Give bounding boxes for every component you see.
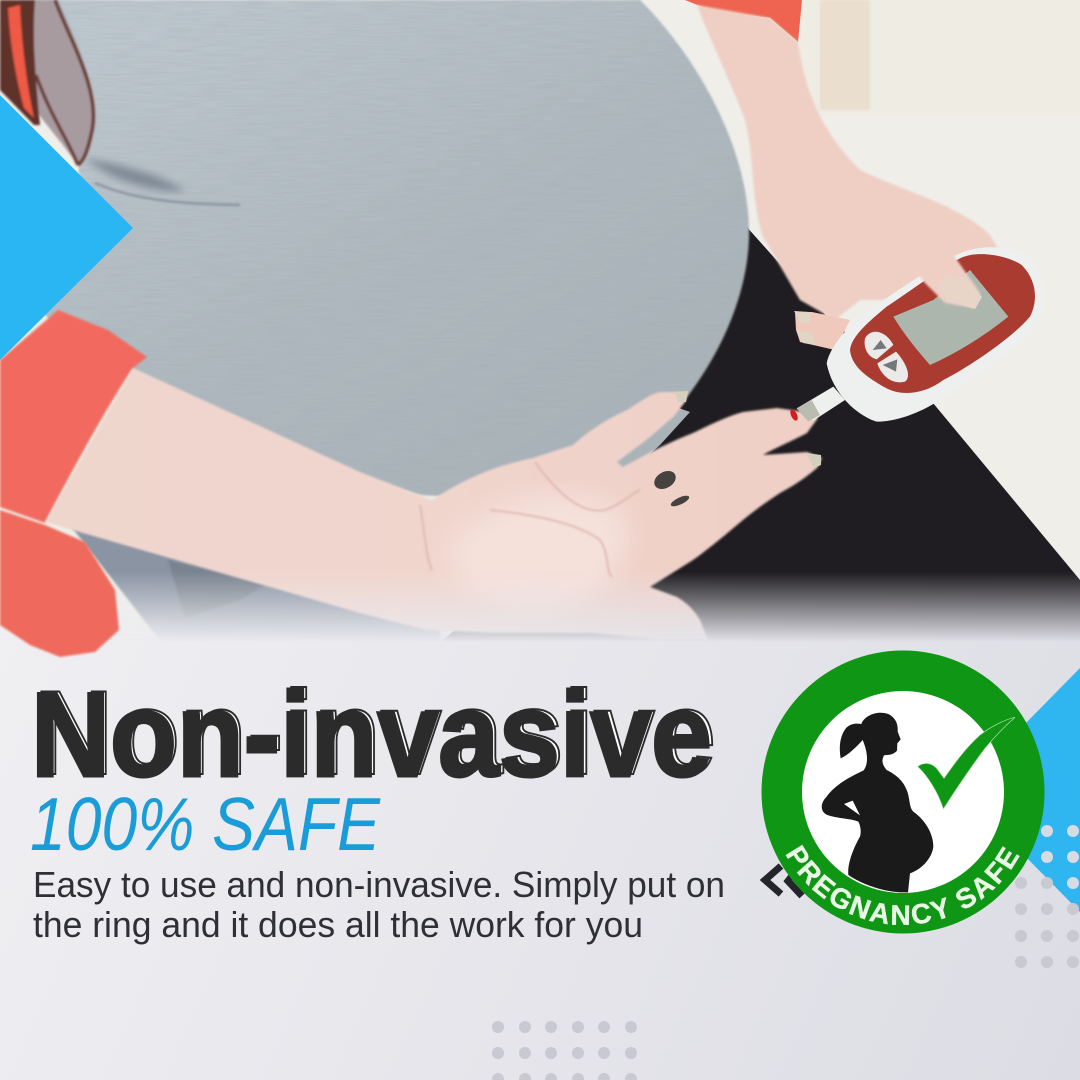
lower shirt under the arm [72, 529, 440, 636]
shirt knit texture [60, 0, 746, 392]
right arm and holding hand [697, 5, 1000, 320]
pregnancy safe badge [762, 650, 1044, 934]
green check mark [918, 717, 1015, 809]
badge label: PREGNANCY SAFE [786, 844, 1020, 925]
finger nails [675, 391, 821, 468]
white centre [802, 691, 1004, 893]
thumb pressing the meter [919, 256, 981, 309]
palm creases [420, 462, 640, 577]
test strip [797, 387, 845, 421]
body text: Easy to use and non-invasive. Simply put on [33, 864, 725, 905]
red sleeve left [0, 310, 147, 523]
heading: Non-invasive [31, 666, 716, 802]
photo: pregnant woman testing blood sugar [0, 0, 1080, 660]
photo backdrop wall [0, 0, 1080, 580]
green ring [762, 650, 1044, 934]
body text [33, 864, 725, 945]
heading solid layer: Non-invasive [31, 668, 712, 802]
palm highlight [454, 494, 626, 599]
curled finger nails [794, 311, 815, 345]
arm and open palm [45, 368, 822, 640]
thumbnail [960, 294, 982, 309]
test strip sensor [797, 400, 820, 422]
meter body [826, 247, 1002, 422]
red sleeve lower left [0, 510, 119, 657]
blood drop on fingertip [790, 409, 798, 421]
red sleeve upper right [685, 0, 802, 42]
up arrow [873, 340, 887, 350]
pregnant silhouette [822, 713, 933, 892]
subheading: 100% SAFE: 100% SAFE [30, 782, 381, 866]
chevron arrows [765, 866, 802, 896]
hair [0, 0, 94, 165]
up button [865, 332, 893, 359]
shirt sliver between thumb and finger [616, 408, 690, 468]
blue diamond right [960, 668, 1080, 912]
body text: the ring and it does all the work for you [33, 904, 643, 945]
down arrow [883, 359, 897, 372]
blue diamond left [0, 95, 133, 360]
lower shirt fold [168, 560, 262, 612]
dot grid right [1015, 825, 1079, 968]
red faceplate [850, 254, 1035, 393]
black trousers [420, 225, 1080, 660]
shirt shadow fold [85, 158, 240, 205]
heading offset outline layer: Non-invasive [34, 666, 716, 800]
grey maternity shirt [20, 0, 749, 496]
dot grid bottom [492, 1021, 637, 1080]
down button [877, 352, 908, 382]
wedding rings [654, 471, 690, 506]
LCD screen [893, 270, 1008, 365]
curled fingers behind the meter [795, 312, 850, 350]
glucose meter [797, 247, 1044, 422]
